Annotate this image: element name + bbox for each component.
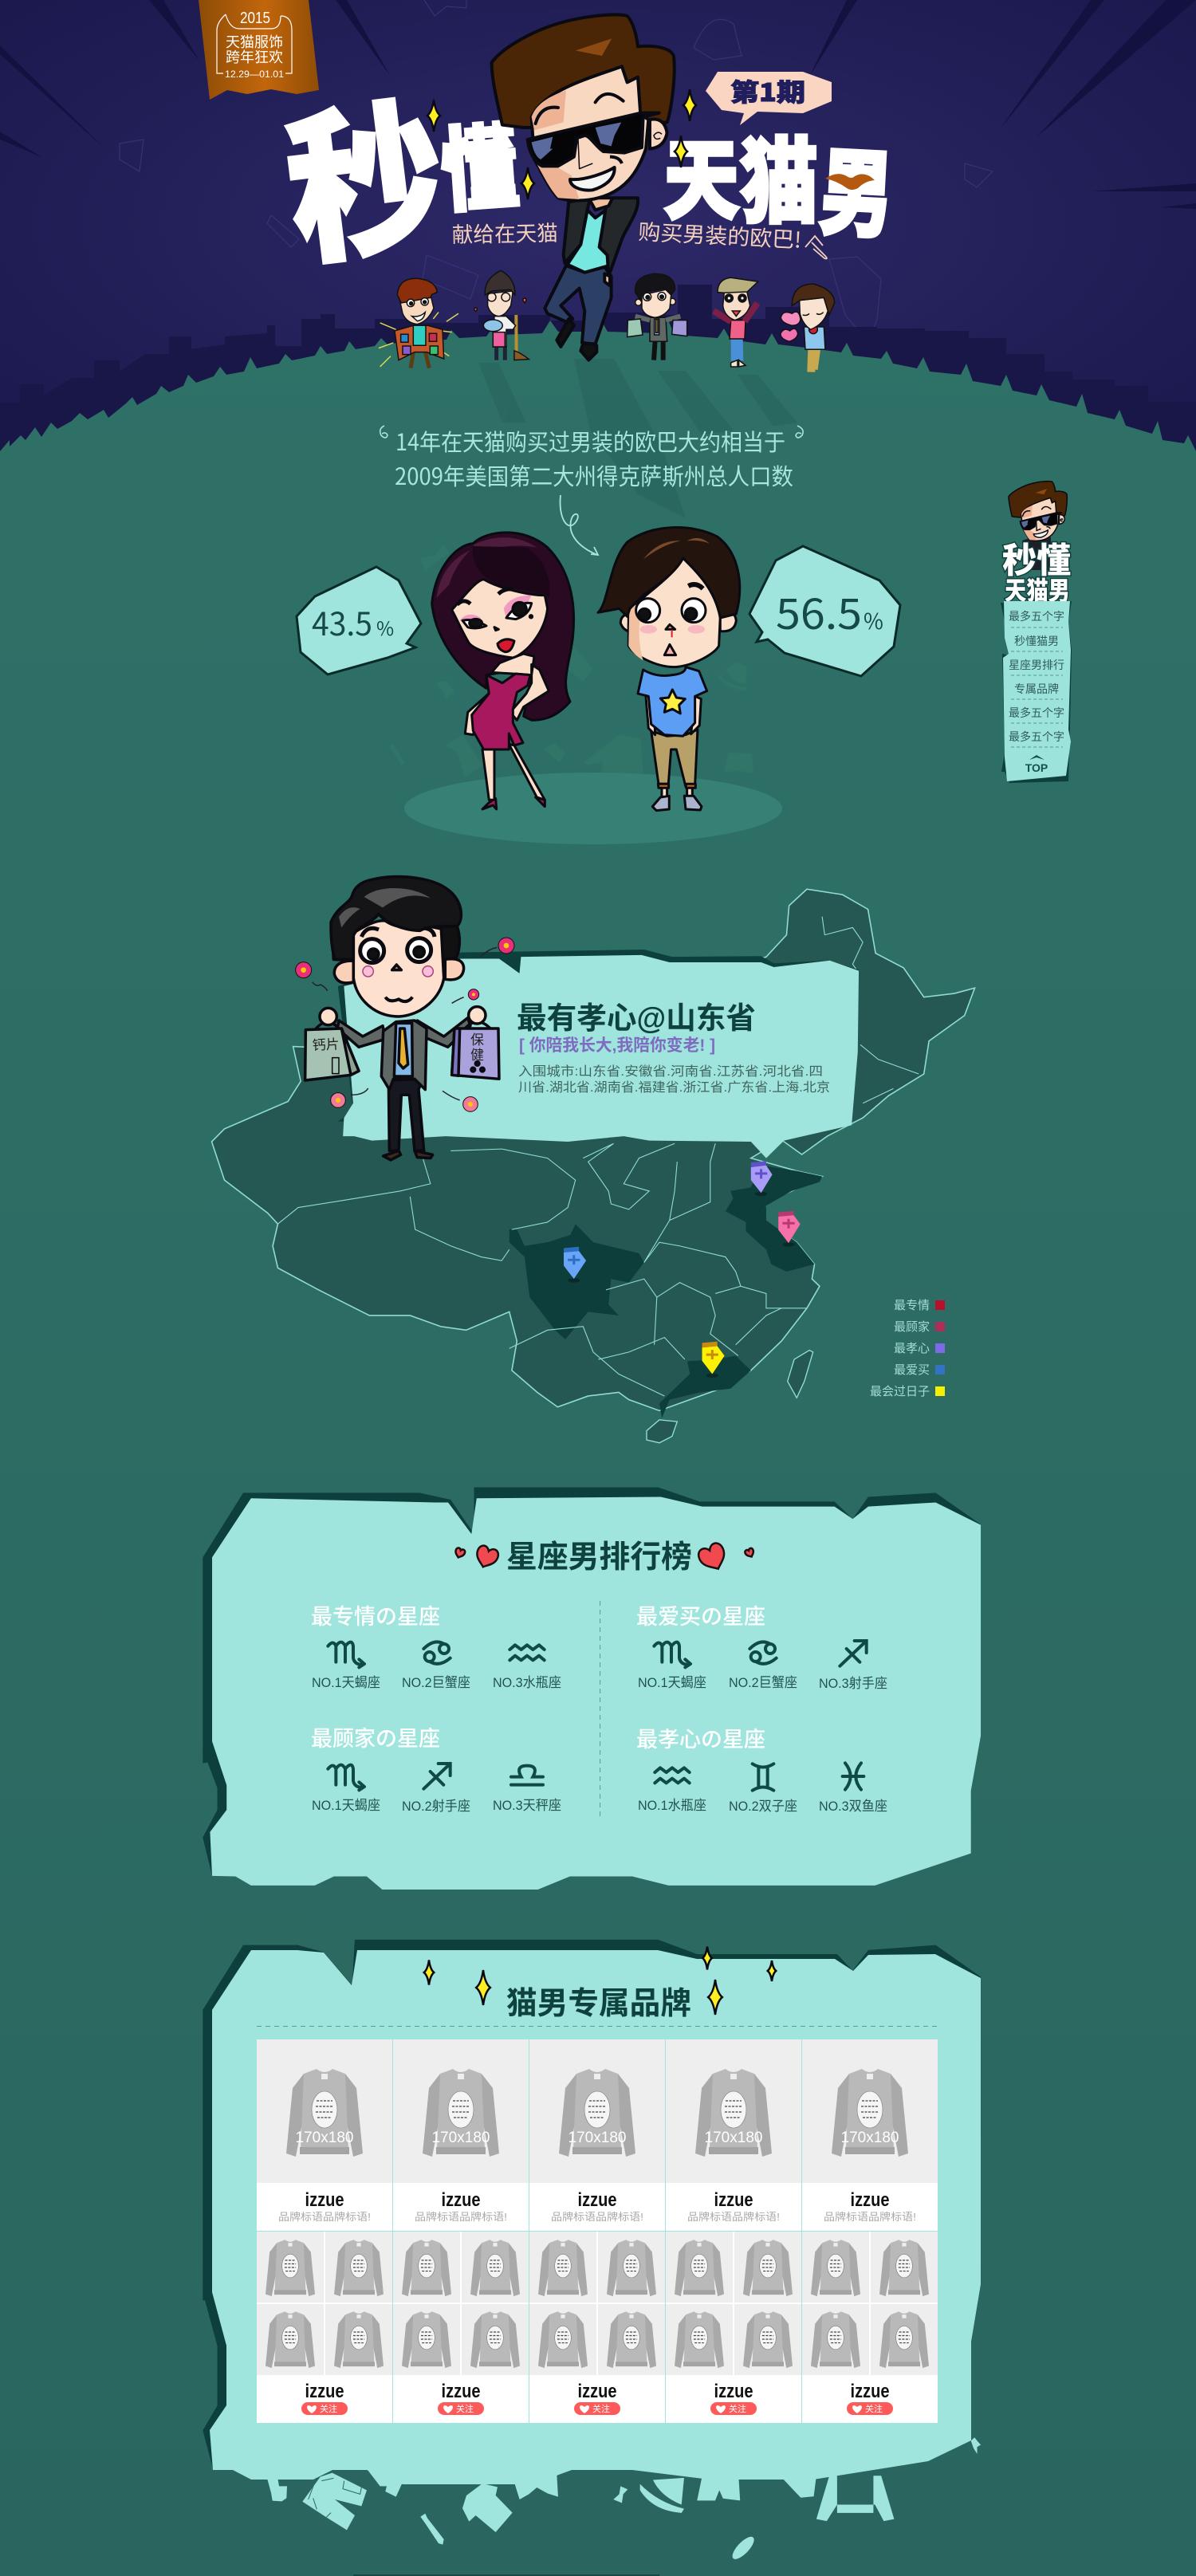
brand column 3: 170x180 [568,2130,626,2146]
sidebar menu panel [1001,601,1072,783]
skyline silhouette [0,285,1196,462]
block: most family-minded signs: NO.1天蝎座 [312,1798,380,1813]
sidebar menu panel: 星座男排行 [1009,659,1064,671]
sidebar navigation [1001,482,1072,783]
pin: purple Shandong [751,1161,773,1196]
brand column 4 [666,2039,801,2423]
sidebar menu panel: 最多五个字 [1009,730,1064,743]
sparkles [427,89,696,199]
brand column 5 [802,2039,938,2423]
sidebar logo [1002,532,1071,608]
falling clothes silhouettes [267,2437,981,2562]
block: most devoted signs: 最专情の星座 [311,1605,440,1629]
map legend: 最顾家 [894,1320,930,1334]
callout: 43.5%: % [376,613,394,641]
icon: hearts [454,1541,755,1574]
callout: 56.5%: % [864,604,883,635]
block: most shopping signs: NO.3射手座 [819,1676,887,1691]
sidebar menu panel: 秒懂猫男 [1014,635,1059,647]
island: Taiwan [788,1351,813,1398]
brand column 2 [393,2039,529,2423]
map of China [212,889,975,1443]
brand column 4: 关注 [729,2403,746,2414]
brand column 4: 170x180 [705,2130,762,2146]
sidebar menu panel: TOP [1025,761,1048,774]
brand column 1: izzue [305,2381,344,2402]
sidebar menu panel: 最多五个字 [1009,706,1064,719]
province: Jiangsu [746,1205,815,1272]
callout: 43.5%: 43.5 [312,599,372,645]
tag: 2015 tmall ribbon: 12.29—01.01 [225,69,284,80]
floor ellipse [404,773,782,844]
block: most filial signs: NO.3双鱼座 [819,1799,887,1814]
brand column 4: izzue [714,2189,753,2211]
brand column 5: izzue [850,2189,890,2211]
pin: pink Jiangsu [778,1211,801,1247]
title: 秒懂天猫男: 秒 [273,45,455,298]
brand column 5: izzue [850,2381,890,2402]
footer line [353,2574,659,2576]
heading: 星座男排行榜 [506,1540,692,1575]
small character: filial son with bags [628,273,687,360]
figure: man with shopping bags: 钙片 [312,1032,340,1054]
icon: sparkles [424,1947,776,2015]
map panel: most filial: 入围城市:山东省.安徽省.河南省.江苏省.河北省.四 [518,1064,823,1079]
arrow: statement to couple [561,495,598,555]
block: most devoted signs [311,1605,561,1690]
block: most filial signs: 最孝心の星座 [636,1728,765,1752]
statement: buyer count [380,424,803,492]
small character: shopaholic with coat [379,278,458,368]
tag: 2015 tmall ribbon: 天猫服饰 [226,34,283,50]
sidebar logo: 天猫男 [1005,571,1070,608]
brand column 3 [529,2039,665,2423]
figure: man in blue tee [598,528,740,811]
panel: tmall men's brands [203,1940,981,2562]
figure: man with shopping bags [305,877,499,1160]
map panel: most filial [338,950,859,1158]
figure: woman [432,533,574,809]
small character: romantic guy with hearts [781,284,835,372]
small character: trendy guy with phone [714,277,758,367]
title: 秒懂天猫男: 男 [816,115,897,258]
province: Sichuan [509,1224,644,1339]
flowers [296,938,514,1111]
title: 秒懂天猫男 [273,45,897,298]
pin: blue Sichuan [564,1247,586,1283]
brand column 1: 170x180 [296,2130,353,2146]
panel: zodiac ranking [203,1487,981,1890]
block: most family-minded signs [311,1727,561,1814]
sidebar menu panel: 最多五个字 [1009,610,1064,623]
brand column 1: izzue [305,2189,344,2211]
brand column 2: izzue [442,2189,480,2211]
sidebar mascot [1009,482,1067,570]
brand column 1: 关注 [320,2403,337,2414]
map legend: 最专情 [894,1299,930,1312]
title: 秒懂天猫男: 猫 [740,107,818,243]
brand column 5: 关注 [865,2403,883,2414]
faint clothes behind couple [389,545,753,777]
brand column 2: 170x180 [432,2130,490,2146]
small character: househusband with broom [474,270,529,360]
main character with sunglasses [492,14,675,360]
map legend: 最爱买 [894,1363,930,1377]
tag: 2015 tmall ribbon [199,0,319,100]
block: most shopping signs [636,1605,887,1691]
figure: man with shopping bags: 保 [470,1028,484,1048]
block: most shopping signs: NO.1天蝎座 [638,1675,706,1690]
brand column 3: izzue [577,2189,617,2211]
block: most devoted signs: NO.2巨蟹座 [402,1675,470,1690]
island: Hainan [647,1420,677,1443]
speech bubble: issue 1 [706,72,832,125]
pin: yellow Guangdong [702,1342,725,1378]
icon: moustache [825,174,875,190]
block: most family-minded signs: NO.3天秤座 [493,1798,561,1813]
block: most family-minded signs: 最顾家の星座 [311,1727,440,1751]
map panel: most filial: 最有孝心@山东省 [517,1002,756,1036]
brand column 1: 品牌标语品牌标语! [278,2211,371,2223]
block: most devoted signs: NO.1天蝎座 [312,1675,380,1690]
brand column 5: 170x180 [841,2130,899,2146]
brand column 3: 品牌标语品牌标语! [551,2211,643,2223]
block: most shopping signs: NO.2巨蟹座 [729,1675,797,1690]
block: most filial signs: NO.2双子座 [729,1799,797,1814]
speech bubble: issue 1: 第1期 [730,73,805,108]
block: most family-minded signs: NO.2射手座 [402,1799,470,1814]
brand column 2: 品牌标语品牌标语! [415,2211,507,2223]
callout: 43.5% [297,567,421,674]
tag: 2015 tmall ribbon: 2015 [240,10,270,27]
brand column 5: 品牌标语品牌标语! [824,2211,916,2223]
tagline: 献给在天猫 [451,216,558,249]
map legend [870,1299,945,1398]
brand column 3: 关注 [592,2403,610,2414]
brand column 3: izzue [577,2381,617,2402]
sidebar logo: 秒懂 [1002,532,1071,583]
block: most devoted signs: NO.3水瓶座 [493,1675,561,1690]
map panel: most filial: 川省.湖北省.湖南省.福建省.浙江省.广东省.上海.北京 [518,1080,830,1095]
block: most filial signs: NO.1水瓶座 [638,1798,706,1813]
block: most shopping signs: 最爱买の星座 [636,1605,765,1629]
brand column 2: 关注 [456,2403,474,2414]
province: Guangdong [659,1355,751,1418]
panel background [203,1487,981,1890]
heading: 猫男专属品牌 [506,1987,691,2021]
statement: buyer count: 2009年美国第二大州得克萨斯州总人口数 [395,458,793,492]
title: 秒懂天猫男: 天 [663,110,740,238]
statement: buyer count: 14年在天猫购买过男装的欧巴大约相当于 [395,424,785,458]
figure: man with shopping bags: 健 [470,1044,484,1064]
callout: 56.5%: 56.5 [776,581,862,641]
tagline [451,214,827,258]
callout: 56.5% [749,546,900,676]
province: Shandong [726,1166,822,1222]
brand column 4: 品牌标语品牌标语! [687,2211,780,2223]
panel background [203,1940,981,2484]
brand column 2: izzue [442,2381,480,2402]
sidebar menu panel: 专属品牌 [1014,682,1059,695]
map legend: 最孝心 [894,1342,930,1355]
brand column 1 [257,2039,392,2423]
map legend: 最会过日子 [870,1385,930,1398]
brand column 4: izzue [714,2381,753,2402]
tag: 2015 tmall ribbon: 跨年狂欢 [226,49,283,65]
title: 秒懂天猫男: 懂 [436,92,521,231]
tagline: 购买男装的欧巴! [638,214,802,254]
map panel: most filial: [ 你陪我长大,我陪你变老! ] [519,1036,715,1055]
block: most filial signs [636,1728,887,1814]
header banner [199,0,897,372]
